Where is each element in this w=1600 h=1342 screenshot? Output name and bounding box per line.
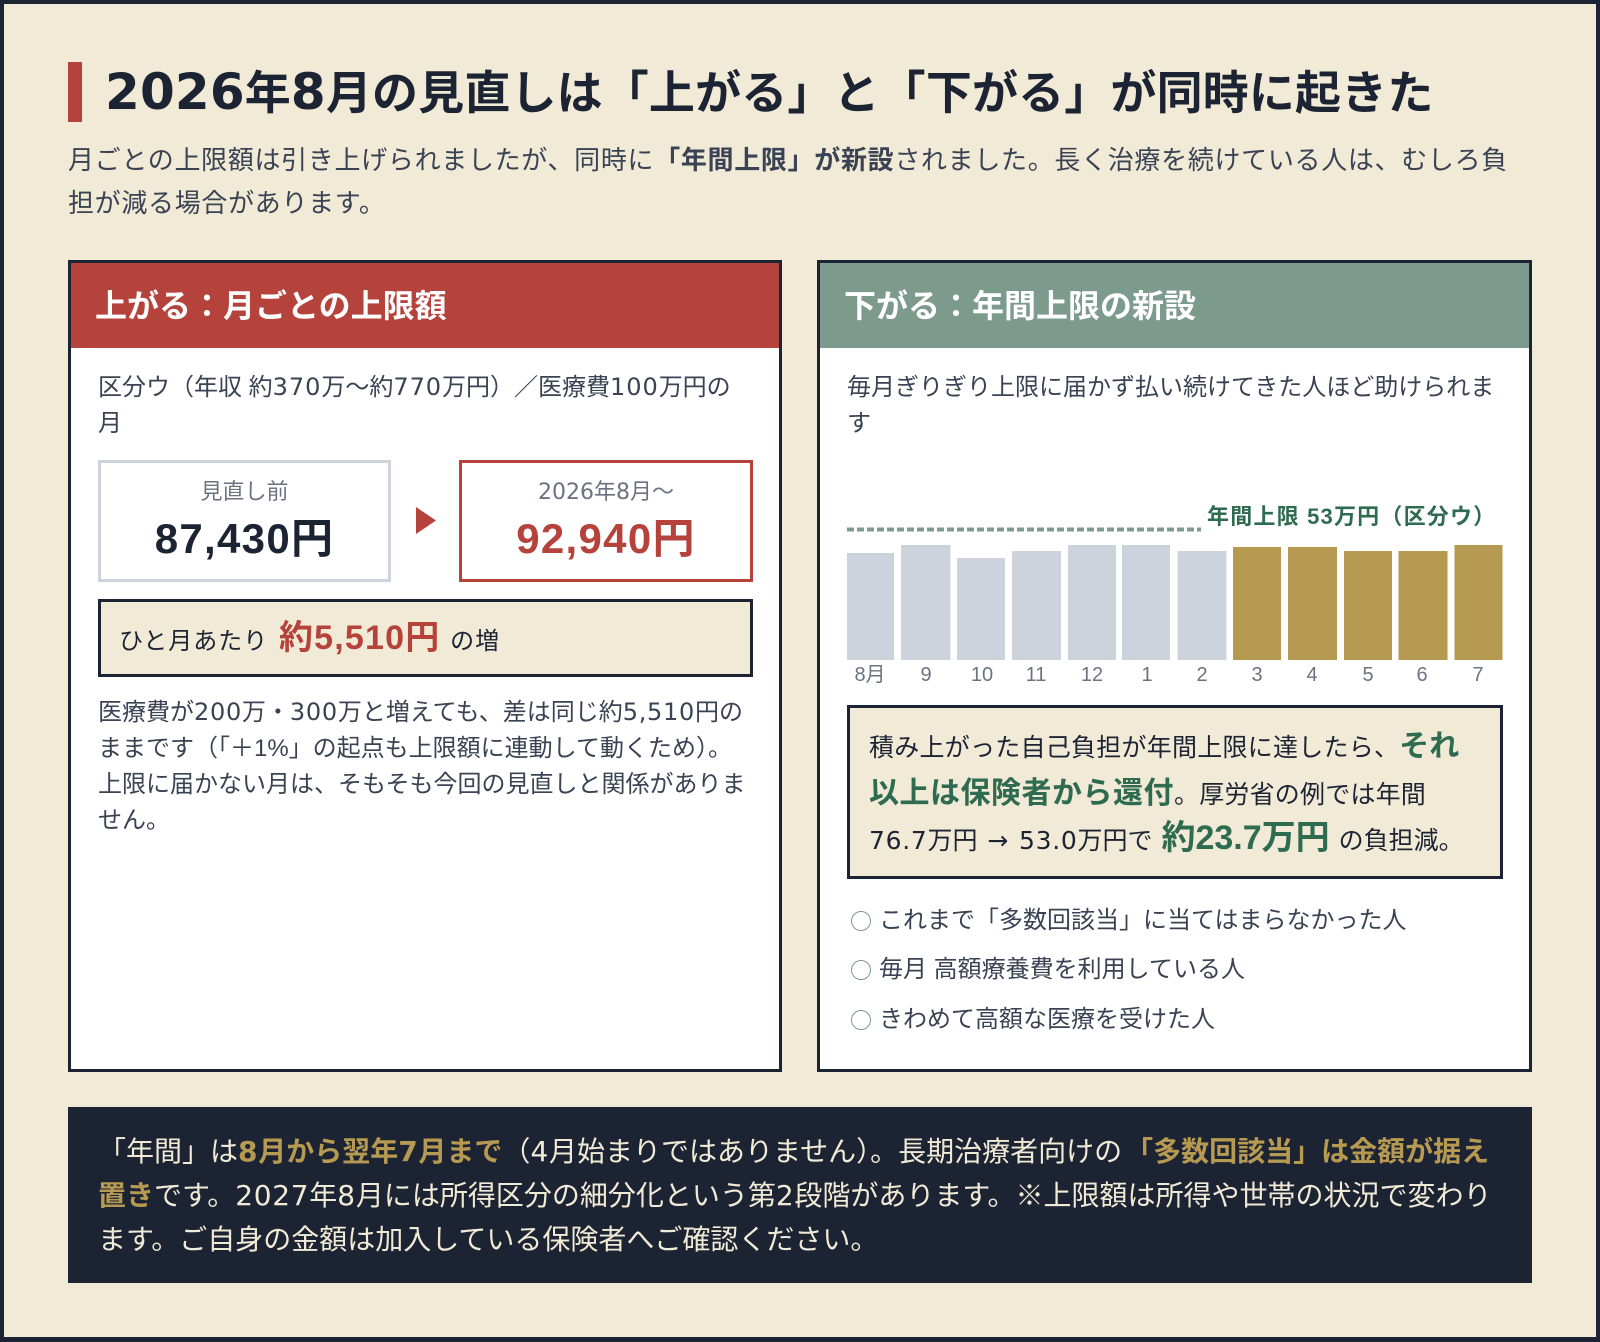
explanation text: ままです（「＋1%」の起点も上限額に連動して動くため）。	[98, 735, 732, 762]
bar chart: monthly payments toward annual cap: 10	[971, 664, 993, 686]
footer text: 「年間」は8月から翌年7月まで（4月始まりではありません）。長期治療者向けの「多数回該当」は金額が据え	[98, 1135, 1489, 1168]
panel header: monthly cap: 上がる：月ごとの上限額	[95, 288, 447, 324]
before amount box: 87,430円	[155, 515, 334, 562]
icon: arrow right	[416, 507, 436, 534]
panel header: annual cap	[820, 263, 1529, 348]
target description: す	[847, 410, 871, 437]
footer text	[98, 1135, 1492, 1255]
condition description: 区分ウ（年収 約370万〜約770万円）／医療費100万円の	[98, 373, 731, 401]
explanation text: せん。	[98, 807, 170, 834]
panel header: annual cap: 下がる：年間上限の新設	[844, 288, 1196, 324]
bar chart: monthly payments toward annual cap: 11	[1026, 664, 1046, 686]
after amount box	[459, 460, 753, 582]
callout: monthly increase: ひと月あたり 約5,510円 の増	[119, 619, 500, 657]
footer text: ます。ご自身の金額は加入している保険者へご確認ください。	[98, 1224, 878, 1255]
footer text: 置きです。2027年8月には所得区分の細分化という第2段階があります。※上限額は所得や世帯の状況で変わり	[98, 1179, 1492, 1212]
panel header: monthly cap	[71, 263, 779, 348]
subtitle text	[68, 145, 1508, 218]
list item: monthly benefit users: 毎月 高額療養費を利用している人	[879, 956, 1245, 983]
bar chart: monthly payments toward annual cap: 1	[1141, 664, 1153, 686]
after amount box: 92,940円	[516, 515, 696, 562]
callout: refund above annual cap: 以上は保険者から還付。厚労省の例では年間	[869, 777, 1426, 810]
subtitle text: 月ごとの上限額は引き上げられましたが、同時に「年間上限」が新設されました。長く治療を続けている人は、むしろ負	[68, 145, 1508, 175]
subtitle text: 担が減る場合があります。	[68, 188, 386, 218]
condition description	[98, 373, 731, 437]
bar chart: monthly payments toward annual cap	[847, 504, 1502, 686]
title: 2026年8月の見直しは「上がる」と「下がる」が同時に起きた	[105, 63, 1433, 121]
bar chart: monthly payments toward annual cap: 8月	[854, 664, 886, 686]
explanation text: 医療費が200万・300万と増えても、差は同じ約5,510円の	[98, 698, 743, 726]
before amount box	[98, 460, 391, 582]
callout: refund above annual cap: 76.7万円 → 53.0万円で 約23.7万円 の負担減。	[869, 819, 1464, 857]
target description: 毎月ぎりぎり上限に届かず払い続けてきた人ほど助けられま	[847, 374, 1494, 401]
list item: never qualified for multiple-use: これまで「多数回該当」に当てはまらなかった人	[879, 907, 1407, 934]
before amount box: 見直し前	[200, 479, 288, 504]
list item: very expensive treatment: きわめて高額な医療を受けた人	[879, 1006, 1215, 1033]
bar chart: monthly payments toward annual cap: 12	[1081, 664, 1103, 686]
bar chart: monthly payments toward annual cap: 2	[1196, 664, 1208, 686]
panel: annual cap goes down	[817, 260, 1532, 1072]
target description	[847, 374, 1494, 437]
after amount box: 2026年8月〜	[538, 479, 674, 505]
footer note	[68, 1107, 1532, 1283]
explanation text: 上限に届かない月は、そもそも今回の見直しと関係がありま	[98, 771, 746, 798]
bar chart: monthly payments toward annual cap: 3	[1251, 664, 1263, 686]
bar chart: monthly payments toward annual cap: 6	[1416, 664, 1428, 686]
callout: monthly increase	[98, 599, 753, 677]
bar chart: monthly payments toward annual cap: 7	[1472, 664, 1484, 686]
explanation text	[98, 698, 746, 834]
panel: monthly cap goes up	[68, 260, 782, 1072]
callout: refund above annual cap: 積み上がった自己負担が年間上限に達したら、それ	[869, 730, 1459, 763]
bar chart: monthly payments toward annual cap: 9	[920, 664, 932, 686]
title accent bar	[68, 62, 82, 122]
callout: refund above annual cap	[847, 705, 1503, 879]
bar chart: monthly payments toward annual cap: 4	[1306, 664, 1318, 686]
bar chart: monthly payments toward annual cap: 年間上限 53万円（区分ウ）	[1207, 504, 1496, 529]
bar chart: monthly payments toward annual cap: 5	[1362, 664, 1374, 686]
condition description: 月	[98, 410, 122, 437]
